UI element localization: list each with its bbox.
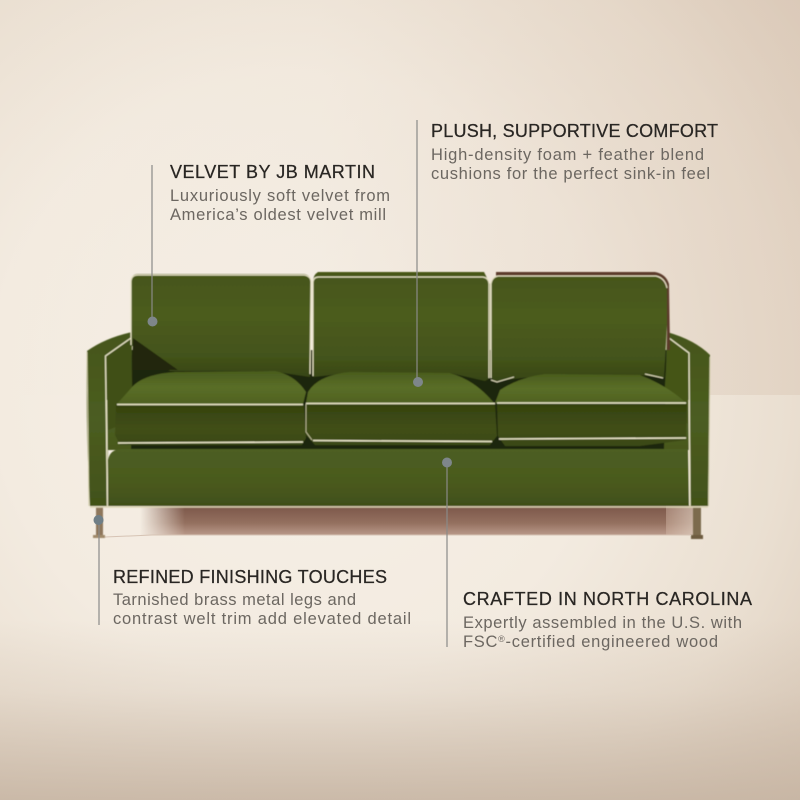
seat cushion middle [306,372,497,445]
heading comfort: PLUSH, SUPPORTIVE COMFORT [431,121,718,141]
left arm [87,332,133,506]
right arm [664,332,710,506]
heading finishing: REFINED FINISHING TOUCHES [113,567,387,587]
leader line comfort [416,120,418,382]
body finishing line one: Tarnished brass metal legs and [113,591,356,609]
marker dot velvet [148,316,158,326]
callout: velvet [148,162,390,326]
seat cushion right [495,374,687,446]
callout: crafted [442,458,752,651]
body crafted line two: ® [498,634,505,644]
body crafted line two: -certified engineered wood [506,633,718,651]
back cushion right [491,272,670,382]
seat cushion left [115,371,306,445]
body crafted line one: Expertly assembled in the U.S. with [463,614,742,632]
marker dot crafted [442,458,452,468]
body comfort line one: High-density foam + feather blend [431,146,704,164]
sofa legs [93,507,703,539]
sofa [87,272,710,539]
sofa shadow on floor [140,505,700,535]
heading crafted: CRAFTED IN NORTH CAROLINA [463,589,752,609]
marker dot comfort [413,377,423,387]
body crafted line two: FSC [463,633,497,651]
back cushion middle [313,272,490,381]
callout: finishing [94,515,411,628]
body comfort line two: cushions for the perfect sink-in feel [431,165,710,183]
leader line finishing [98,520,100,625]
sofa base [90,400,708,507]
body finishing line two: contrast welt trim add elevated detail [113,610,411,628]
leader line velvet [151,165,153,322]
leader line crafted [446,462,448,647]
body velvet line two: America’s oldest velvet mill [170,206,386,224]
back cushion left [131,274,311,377]
floor contact line [105,535,690,537]
dark seat gap [125,350,675,452]
callout: comfort [413,120,718,387]
heading velvet: VELVET BY JB MARTIN [170,162,375,182]
body velvet line one: Luxuriously soft velvet from [170,187,390,205]
marker dot finishing [94,515,104,525]
